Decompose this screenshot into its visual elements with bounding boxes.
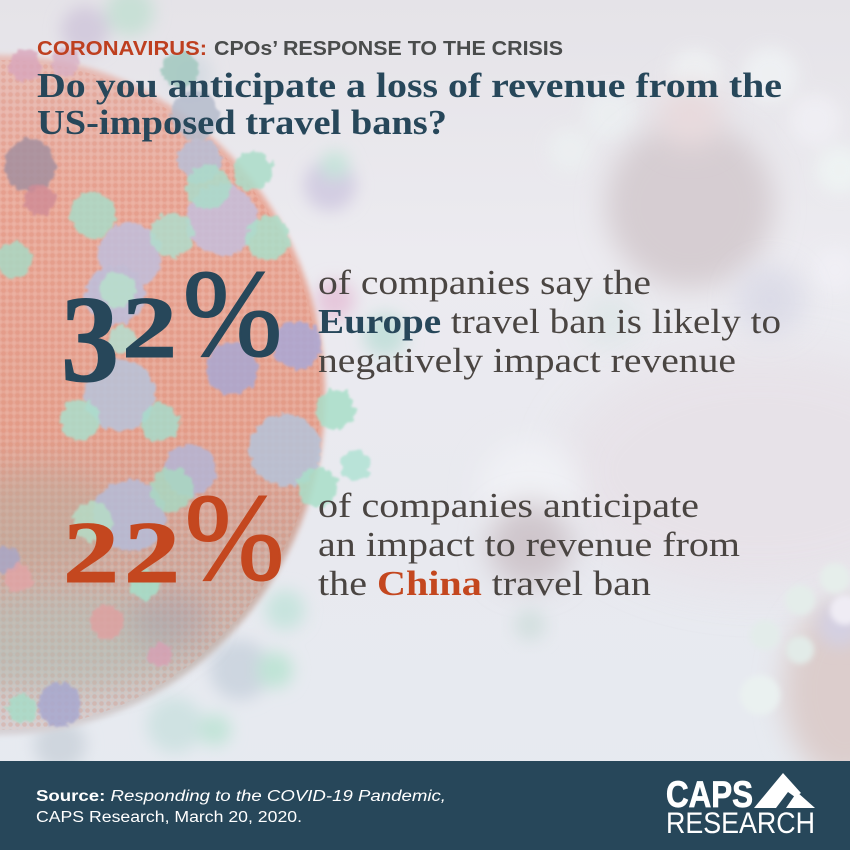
title [37, 66, 782, 142]
title: US-imposed travel bans? [37, 103, 447, 142]
illustration: blurred virus centre [480, 440, 580, 641]
statistic: 32% [61, 245, 282, 408]
illustration: large virus particle [0, 0, 407, 771]
soft spikes behind the particle [34, 0, 407, 771]
text: China impact: of companies anticipate [318, 486, 699, 525]
statistic: 32%: % [183, 245, 282, 382]
text: China impact: an impact to revenue from [318, 525, 740, 564]
source citation: CAPS Research, March 20, 2020. [36, 809, 302, 826]
text: Europe impact [318, 263, 781, 380]
text: Europe impact: of companies say the [318, 263, 651, 302]
statistic: 22%: 2 [124, 505, 180, 602]
spike clusters: green tips [0, 52, 370, 723]
logo: CAPS Research: CAPS [666, 774, 753, 815]
surface shading [0, 470, 210, 690]
text: China impact: the China travel ban [318, 564, 651, 603]
footer band [0, 761, 850, 850]
logo: CAPS Research: RESEARCH [666, 807, 815, 840]
text: Europe impact: Europe travel ban is likely to [318, 302, 781, 341]
statistic: 22%: % [185, 469, 284, 606]
text: Europe impact: negatively impact revenue [318, 341, 736, 380]
illustration: blurred virus lower right [740, 563, 850, 780]
spike clusters: lavender bases [0, 91, 321, 727]
title: Do you anticipate a loss of revenue from the [37, 66, 782, 105]
logo: CAPS Research [666, 773, 815, 840]
statistic: 22%: 2 [63, 505, 119, 602]
spike clusters: pink tips [4, 48, 172, 667]
kicker heading: CPOs’ RESPONSE TO THE CRISIS [214, 38, 563, 60]
source citation: Source: Responding to the COVID-19 Pandemic, [36, 788, 446, 805]
statistic: 22% [63, 469, 284, 606]
illustration: blurred virus upper right [548, 47, 850, 346]
source citation [36, 788, 446, 826]
kicker heading: CORONAVIRUS: [37, 38, 207, 60]
statistic: 32%: 2 [122, 280, 177, 377]
kicker heading [37, 38, 563, 60]
text: China impact [318, 486, 740, 603]
statistic: 32%: 3 [61, 271, 119, 408]
